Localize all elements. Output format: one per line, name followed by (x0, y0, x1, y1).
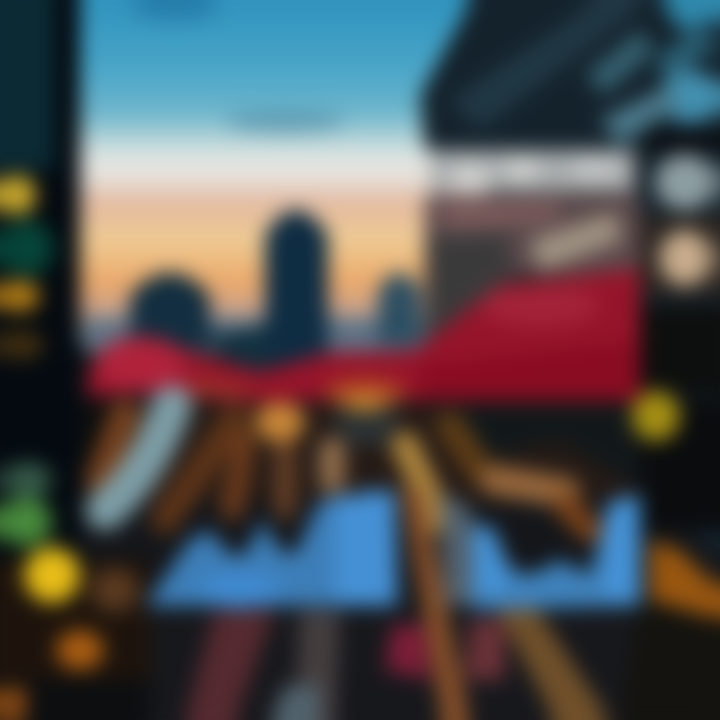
right building pale band and facade (425, 150, 640, 345)
red banner (88, 268, 640, 402)
left building lights (0, 175, 54, 546)
sky gradient (78, 0, 488, 345)
skyline towers (85, 210, 425, 372)
street glows (255, 379, 680, 442)
bottom left orange glows (0, 568, 139, 718)
right dark building (420, 0, 720, 560)
blue bars (145, 490, 640, 610)
left dark building (0, 0, 80, 620)
lower street base (82, 400, 720, 530)
bottom street (0, 560, 720, 720)
white curved stream (105, 405, 172, 510)
yellow street light (24, 547, 80, 603)
right orange glow (650, 540, 720, 620)
central road light trail (402, 490, 470, 720)
orange light streaks (100, 415, 590, 530)
